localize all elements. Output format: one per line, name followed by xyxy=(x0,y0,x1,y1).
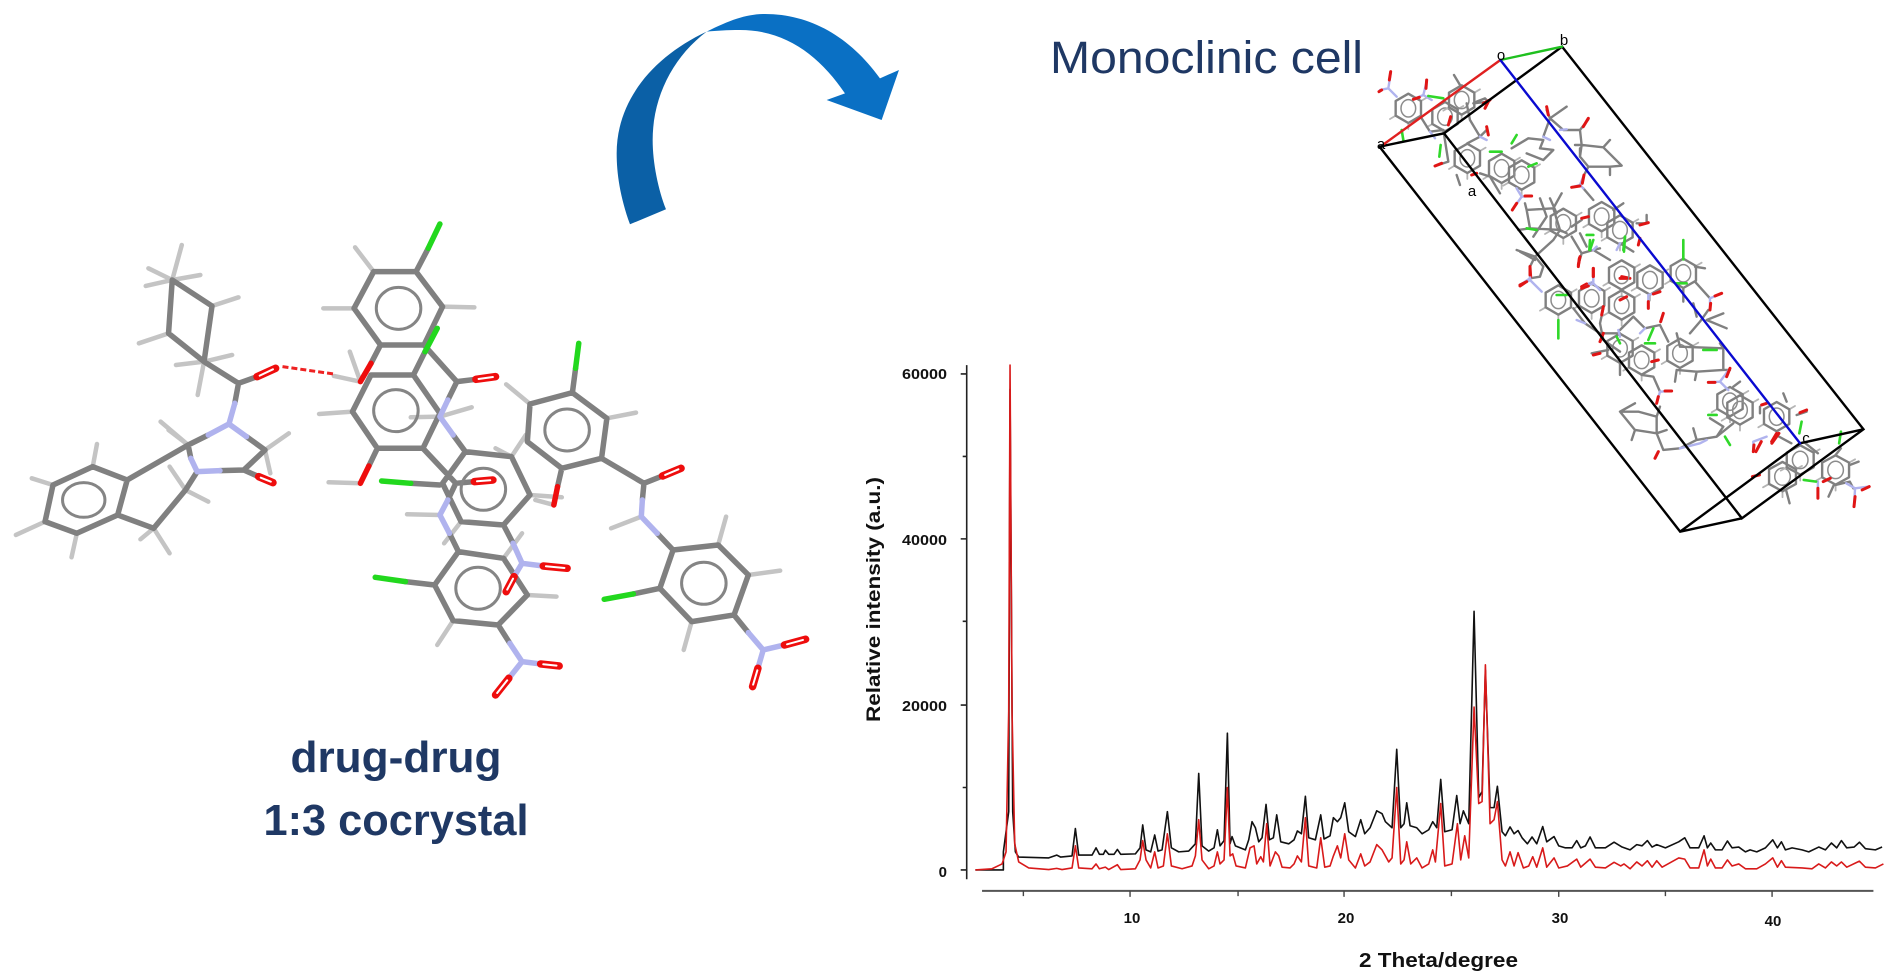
unit cell box xyxy=(1379,47,1863,532)
heading: drug-drug 1:3 cocrystal xyxy=(264,733,528,845)
axis letters: c xyxy=(1802,430,1810,447)
molecular structure: drug-drug cocrystal xyxy=(16,224,806,695)
packed molecules central region xyxy=(1520,237,1807,458)
hydrogen bond xyxy=(282,367,334,374)
axis letters xyxy=(1377,32,1810,447)
nitrogen atoms xyxy=(191,400,784,678)
x axis tick labels: 40 xyxy=(1765,913,1781,930)
red calculated trace xyxy=(975,365,1883,870)
packed molecules upper region xyxy=(1379,72,1648,287)
hydrogen atoms xyxy=(16,245,780,650)
axis letters: a xyxy=(1468,183,1477,200)
packed molecules lower corner xyxy=(1752,432,1869,507)
y axis title: Relative intensity (a.u.) xyxy=(864,477,885,722)
curved arrow xyxy=(617,14,899,224)
heading: drug-drug 1:3 cocrystal: drug-drug xyxy=(290,733,502,782)
x axis tick labels: 30 xyxy=(1552,910,1568,927)
aromatic ring centres xyxy=(63,287,726,609)
cell axis c xyxy=(1500,60,1800,443)
x axis tick labels: 10 xyxy=(1124,910,1140,927)
axis letters: o xyxy=(1497,47,1505,64)
y axis tick labels: 40000 xyxy=(902,532,947,549)
y axis tick labels: 20000 xyxy=(902,698,947,715)
x axis tick labels: 20 xyxy=(1338,910,1354,927)
x axis title: 2 Theta/degree xyxy=(1359,950,1518,972)
y axis tick labels: 0 xyxy=(939,864,947,881)
axes xyxy=(961,365,1873,897)
title: monoclinic cell: Monoclinic cell xyxy=(1050,32,1363,83)
heading: drug-drug 1:3 cocrystal: 1:3 cocrystal xyxy=(264,796,528,845)
chart: PXRD pattern xyxy=(864,365,1883,972)
oxygen atoms xyxy=(360,363,558,505)
carbon skeleton xyxy=(45,248,748,643)
chlorine atoms xyxy=(375,224,633,599)
y axis tick labels: 60000 xyxy=(902,366,947,383)
cell axis a xyxy=(1384,60,1500,144)
y axis tick labels xyxy=(902,366,947,881)
black experimental trace xyxy=(975,389,1882,870)
x axis tick labels xyxy=(1124,910,1781,930)
axis letters: a xyxy=(1377,136,1386,153)
unit cell crystal packing xyxy=(1377,32,1869,532)
cell axis b xyxy=(1500,47,1562,60)
axis letters: b xyxy=(1560,32,1568,49)
